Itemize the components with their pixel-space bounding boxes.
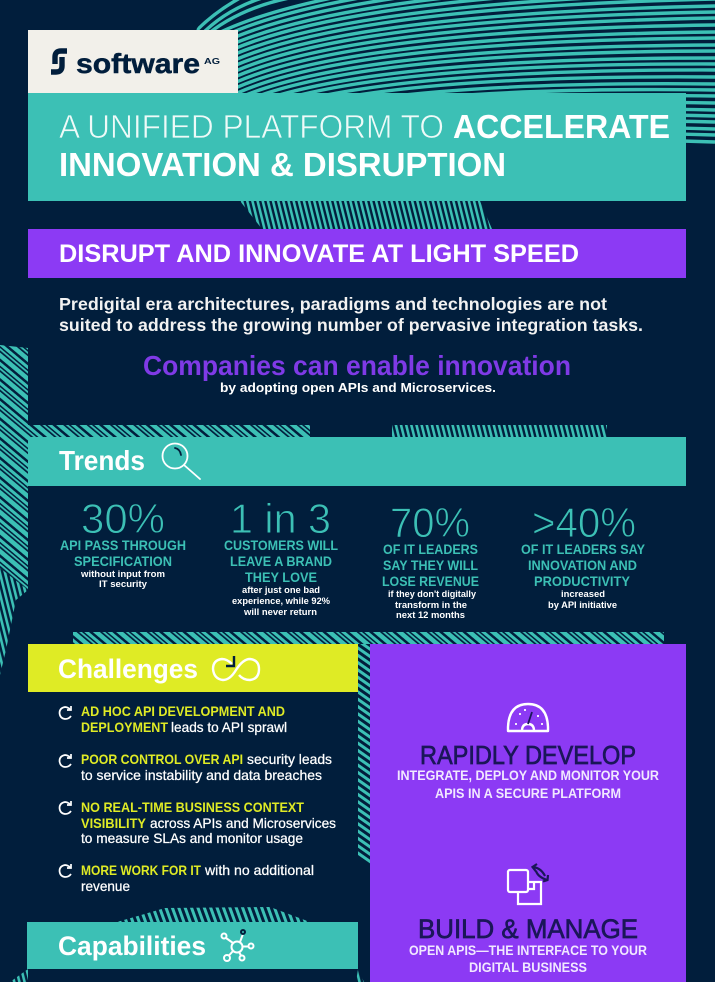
stat: 1 in 3: LEAVE A BRAND — [230, 553, 332, 569]
icon: refresh arrow 2 — [60, 754, 71, 767]
challenge item 3: NO REAL-TIME BUSINESS CONTEXT — [81, 799, 304, 815]
capabilities heading: Capabilities — [58, 931, 206, 961]
title line 1: A UNIFIED PLATFORM TO — [59, 108, 444, 145]
stat: 30 percent — [60, 495, 186, 590]
stat: over 40 percent: OF IT LEADERS SAY — [521, 541, 646, 557]
build and manage heading: BUILD & MANAGE — [418, 914, 638, 944]
panel: capabilities header — [27, 922, 358, 969]
callout subtext: by adopting open APIs and Microservices. — [220, 380, 496, 395]
title emphasis: ACCELERATE — [453, 108, 670, 145]
logo wordmark: software — [76, 48, 200, 79]
stat: 70 percent: SAY THEY WILL — [383, 557, 478, 573]
challenge item 4: MORE WORK FOR IT — [81, 862, 201, 878]
stat: 30 percent: 30% — [81, 495, 165, 542]
stat: 70 percent: next 12 months — [396, 610, 465, 621]
icon: refresh arrow 4 — [60, 864, 71, 877]
challenge item 1: leads to API sprawl — [171, 719, 287, 735]
banner heading: DISRUPT AND INNOVATE AT LIGHT SPEED — [59, 240, 579, 268]
icon: speedometer gauge — [508, 704, 548, 731]
challenge item 1: DEPLOYMENT — [81, 719, 168, 735]
stat: 70 percent: if they don't digitally — [388, 589, 477, 600]
build and manage text — [409, 943, 647, 975]
stat: 1 in 3: experience, while 92% — [232, 596, 331, 607]
challenge item 3: VISIBILITY — [81, 815, 147, 831]
rapidly develop text: INTEGRATE, DEPLOY AND MONITOR YOUR — [397, 768, 659, 783]
logo — [28, 30, 238, 93]
challenge item 3: to measure SLAs and monitor usage — [81, 830, 303, 846]
logo suffix: AG — [204, 56, 220, 66]
panel: purple benefits — [370, 644, 686, 982]
callout — [143, 350, 571, 395]
stat: 1 in 3: THEY LOVE — [245, 569, 317, 585]
challenges list — [60, 703, 336, 894]
stat: over 40 percent: increased — [561, 589, 605, 600]
section banner — [28, 229, 686, 278]
trends heading: Trends — [59, 445, 145, 476]
panel: trends header — [28, 437, 686, 486]
stat: over 40 percent: >40% — [532, 499, 636, 546]
rapidly develop text — [397, 768, 659, 801]
title line 2: INNOVATION & DISRUPTION — [59, 146, 506, 183]
stat: 1 in 3: CUSTOMERS WILL — [224, 537, 338, 553]
intro paragraph: suited to address the growing number of pervasive integration tasks. — [59, 315, 643, 335]
rapidly develop text: APIS IN A SECURE PLATFORM — [435, 786, 621, 801]
icon: refresh arrow 3 — [60, 801, 71, 814]
challenge item 3: across APIs and Microservices — [150, 815, 336, 831]
intro paragraph — [59, 294, 643, 335]
stat: 1 in 3 — [224, 495, 338, 618]
stat: 30 percent: API PASS THROUGH — [60, 537, 186, 553]
icon: refresh arrow 1 — [60, 706, 71, 719]
stat: over 40 percent: PRODUCTIVITY — [534, 573, 631, 589]
stat: over 40 percent — [521, 499, 646, 611]
stat: 1 in 3: will never return — [243, 607, 317, 618]
icon: software ag mark — [51, 51, 67, 72]
build and manage text: DIGITAL BUSINESS — [469, 960, 587, 975]
challenge item 3 — [81, 799, 336, 846]
challenge item 1 — [81, 703, 287, 735]
stat: 70 percent: OF IT LEADERS — [383, 541, 478, 557]
stat: over 40 percent: by API initiative — [548, 600, 617, 611]
challenge item 4 — [81, 862, 314, 894]
panel: challenges header — [28, 644, 358, 692]
stat: 30 percent: SPECIFICATION — [74, 553, 172, 569]
challenges heading: Challenges — [58, 654, 198, 684]
title panel — [28, 93, 686, 201]
stat: 30 percent: IT security — [99, 579, 148, 590]
callout heading: Companies can enable innovation — [143, 350, 571, 381]
challenge item 1: AD HOC API DEVELOPMENT AND — [81, 703, 285, 719]
stat: 70 percent: 70% — [390, 499, 470, 546]
challenge item 4: revenue — [81, 878, 130, 894]
icon: infinity loop — [213, 656, 259, 680]
stat: 1 in 3: after just one bad — [242, 585, 320, 596]
challenge item 2 — [81, 751, 332, 783]
icon: network nodes — [222, 930, 254, 961]
rapidly develop heading: RAPIDLY DEVELOP — [420, 740, 636, 770]
challenge item 2: to service instability and data breaches — [81, 767, 322, 783]
build and manage text: OPEN APIS—THE INTERFACE TO YOUR — [409, 943, 647, 958]
stat: 70 percent: LOSE REVENUE — [382, 573, 479, 589]
intro paragraph: Predigital era architectures, paradigms and technologies are not — [59, 294, 607, 314]
stat: 1 in 3: 1 in 3 — [230, 495, 331, 542]
stat: over 40 percent: INNOVATION AND — [528, 557, 637, 573]
stat: 70 percent — [382, 499, 479, 621]
challenge item 4: with no additional — [204, 862, 314, 878]
stat: 70 percent: transform in the — [395, 600, 467, 611]
icon: magnifying glass — [162, 444, 200, 479]
challenge item 2: security leads — [247, 751, 332, 767]
challenge item 2: POOR CONTROL OVER API — [81, 751, 243, 767]
stat: 30 percent: without input from — [80, 569, 165, 580]
icon: overlapping squares — [508, 864, 548, 904]
